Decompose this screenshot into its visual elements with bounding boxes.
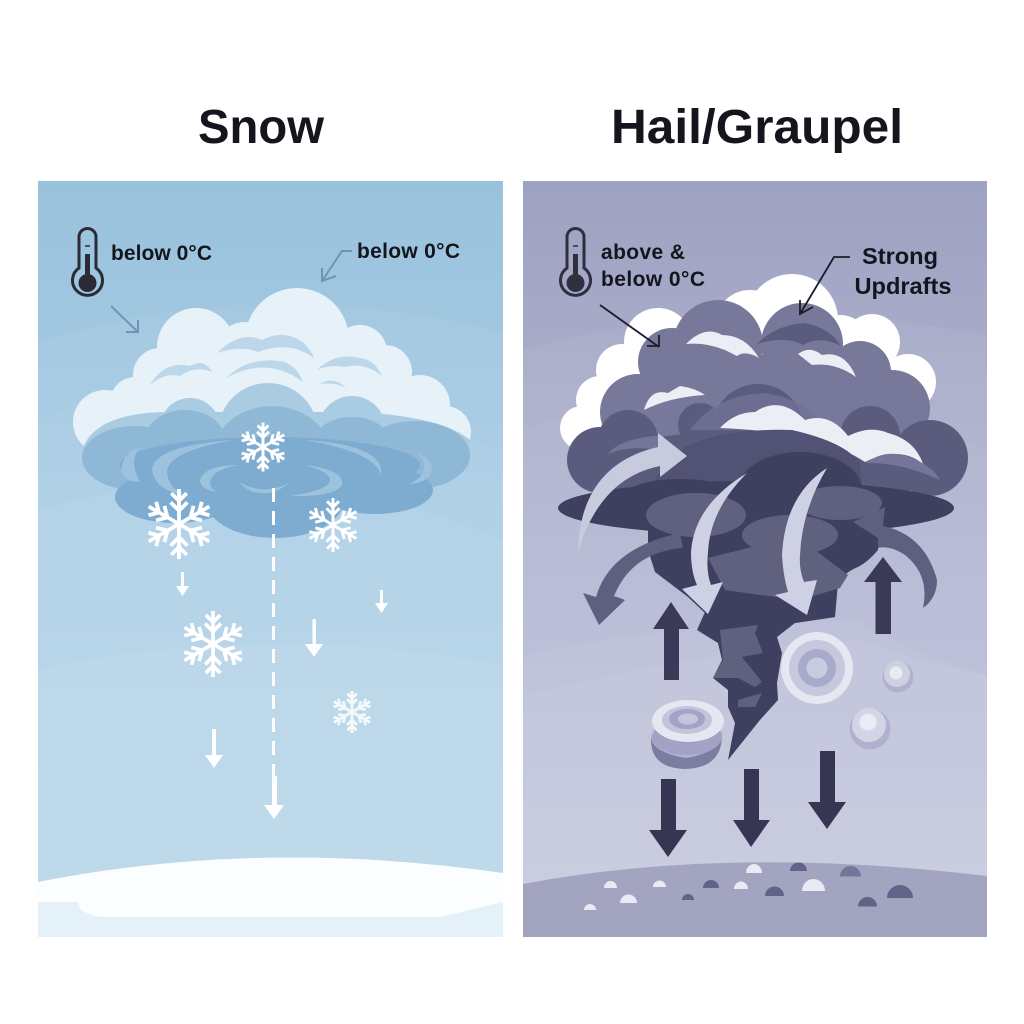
inner swirl grey xyxy=(646,486,882,600)
hailstone: small lower xyxy=(850,708,890,750)
swirl highlights xyxy=(121,440,432,497)
label: above & below 0°C: below 0°C xyxy=(601,268,705,291)
arrow to cloud from left xyxy=(111,306,138,332)
thermometer icon xyxy=(560,228,590,295)
downdraft arrow right, pale xyxy=(775,468,827,615)
small falling arrows xyxy=(176,572,388,768)
cloud top, white xyxy=(73,288,471,458)
sky bands xyxy=(38,304,503,937)
white highlights upper xyxy=(644,332,856,410)
hailstone: layered disc xyxy=(651,700,724,769)
dark lid xyxy=(650,430,862,490)
label: below 0°C: below 0°C xyxy=(111,242,212,265)
tornado funnel xyxy=(697,605,835,760)
title: Hail/Graupel: Hail/Graupel xyxy=(611,101,903,154)
snowflakes xyxy=(144,422,373,733)
left grey fold xyxy=(608,435,665,454)
snow ground xyxy=(38,857,503,937)
cloud mid layer xyxy=(82,383,470,483)
hail panel background xyxy=(523,181,987,937)
thermometer icon xyxy=(73,228,103,295)
mid cloud dark xyxy=(567,384,968,510)
updraft arrow right xyxy=(864,557,902,634)
mid lighter inset xyxy=(690,393,825,430)
arrow to cloud, left xyxy=(600,305,659,347)
upper dark crease xyxy=(757,323,841,346)
tornado inner grey xyxy=(713,625,763,707)
hailstone: ringed cross-section xyxy=(781,632,853,704)
cloud base xyxy=(115,437,433,538)
sky bands xyxy=(523,316,987,937)
white cloud backing xyxy=(560,274,936,450)
label: below 0°C top right: below 0°C xyxy=(357,240,460,263)
hail on ground xyxy=(584,862,913,910)
underside darkest xyxy=(558,452,954,623)
hailstone: small top right xyxy=(882,661,914,692)
storm cloud xyxy=(558,274,968,760)
label: Strong Updrafts: Strong xyxy=(862,243,938,269)
panel: hail/graupel xyxy=(523,181,987,937)
cloud top shading xyxy=(150,335,382,388)
updraft arrow left xyxy=(653,602,689,680)
upper cloud grey xyxy=(600,300,930,450)
inflow arrow left, pale xyxy=(578,433,687,552)
arrow to cloud from right xyxy=(322,251,352,281)
arrow to cloud, strong updrafts xyxy=(800,257,850,314)
label: above & below 0°C: above & xyxy=(601,241,685,264)
dashed fall line and arrow xyxy=(264,488,284,819)
title: Snow: Snow xyxy=(198,101,325,154)
cloud body xyxy=(82,406,470,510)
hail ground xyxy=(523,862,987,937)
panel: snow xyxy=(38,181,503,937)
right pale inset xyxy=(866,454,940,480)
downdraft arrow middle, pale xyxy=(682,473,747,614)
label: Strong Updrafts xyxy=(854,243,952,299)
snow cloud xyxy=(73,288,471,538)
falling arrows xyxy=(649,751,846,857)
outflow curl right, dark xyxy=(853,507,937,608)
outflow arrow left, dark xyxy=(583,533,683,625)
snow panel background xyxy=(38,181,503,937)
bright cloud ridge xyxy=(720,405,923,464)
label: above & below 0°C xyxy=(601,241,705,291)
label: Strong Updrafts: Updrafts xyxy=(854,273,952,299)
